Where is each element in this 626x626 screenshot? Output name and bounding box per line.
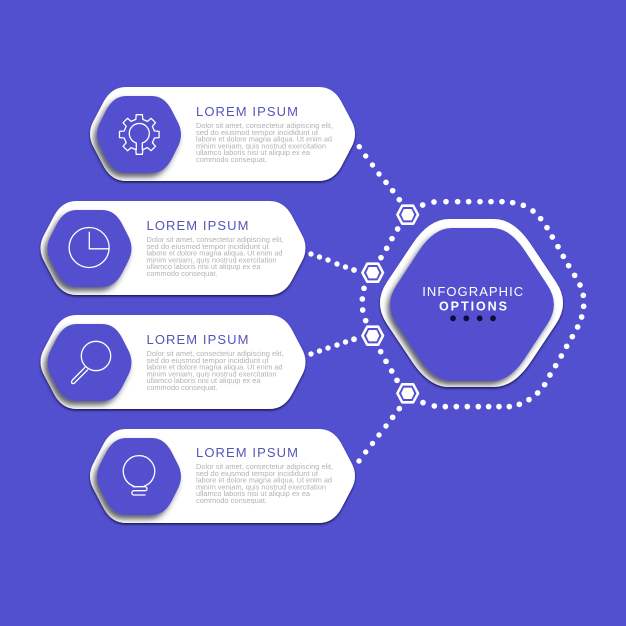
panel: option 3 (40, 315, 306, 409)
icon: light bulb (123, 456, 155, 495)
hexagon badge 2 (48, 210, 132, 287)
body text 2: ullamco laboris nisi ut aliquip ex ea (146, 262, 261, 271)
body text 4: commodo consequat. (196, 496, 267, 505)
body text 1: sed do eiusmod tempor incididunt ut (196, 128, 319, 137)
dotted connectors and ring (308, 144, 586, 464)
node 4 (397, 384, 418, 402)
four black dots (450, 315, 496, 321)
central hexagon face (390, 228, 554, 381)
body text 4: sed do eiusmod tempor incididunt ut (196, 469, 319, 478)
title 4: LOREM IPSUM (196, 445, 298, 460)
icon: gear (120, 115, 159, 154)
body text 1: labore et dolore magna aliqua. Ut enim ad (196, 135, 332, 144)
icon: magnifying glass (72, 341, 111, 384)
hexagon badge 4 (97, 438, 181, 515)
panel: option 2 (40, 201, 306, 295)
body text 4: ullamco laboris nisi ut aliquip ex ea (196, 489, 311, 498)
node 3 (362, 327, 383, 345)
panel: option 4 (90, 429, 355, 523)
body text 3: minim veniam, quis nostrud exercitation (146, 369, 276, 378)
central hexagon rim (380, 219, 563, 387)
body text 4 (196, 462, 333, 505)
title 2: LOREM IPSUM (146, 218, 248, 233)
card 1 (90, 87, 355, 181)
title 1: LOREM IPSUM (196, 104, 298, 119)
body text 1 (196, 121, 333, 164)
body text 3: ullamco laboris nisi ut aliquip ex ea (146, 376, 261, 385)
body text 3 (146, 349, 284, 392)
central hexagon (380, 219, 563, 387)
central subheading: OPTIONS (439, 300, 507, 314)
body text 4: labore et dolore magna aliqua. Ut enim ad (196, 476, 332, 485)
node 2 (362, 264, 383, 282)
body text 4: minim veniam, quis nostrud exercitation (196, 482, 326, 491)
body text 2: commodo consequat. (146, 269, 218, 278)
body text 4: Dolor sit amet, consectetur adipiscing elit, (196, 462, 333, 471)
body text 2: sed do eiusmod tempor incididunt ut (146, 242, 269, 251)
card 2 (40, 201, 306, 295)
hexagon badge 3 (48, 324, 132, 401)
body text 2: Dolor sit amet, consectetur adipiscing elit, (146, 235, 284, 244)
body text 3: labore et dolore magna aliqua. Ut enim ad (146, 363, 282, 372)
body text 1: Dolor sit amet, consectetur adipiscing elit, (196, 121, 333, 130)
central heading: INFOGRAPHIC (422, 284, 523, 299)
body text 2 (146, 235, 284, 278)
body text 1: minim veniam, quis nostrud exercitation (196, 141, 326, 150)
body text 3: commodo consequat. (146, 383, 218, 392)
title 3: LOREM IPSUM (146, 332, 248, 347)
small hexagon nodes (362, 206, 418, 402)
icon: pie chart (69, 227, 109, 267)
body text 1: ullamco laboris nisi ut aliquip ex ea (196, 148, 311, 157)
body text 3: Dolor sit amet, consectetur adipiscing elit, (146, 349, 284, 358)
body text 1: commodo consequat. (196, 155, 267, 164)
body text 2: labore et dolore magna aliqua. Ut enim ad (146, 249, 282, 258)
hexagon badge 1 (97, 96, 181, 173)
card 4 (90, 429, 355, 523)
panel: option 1 (90, 87, 355, 181)
body text 3: sed do eiusmod tempor incididunt ut (146, 356, 269, 365)
node 1 (397, 206, 418, 224)
card 3 (40, 315, 306, 409)
body text 2: minim veniam, quis nostrud exercitation (146, 255, 276, 264)
